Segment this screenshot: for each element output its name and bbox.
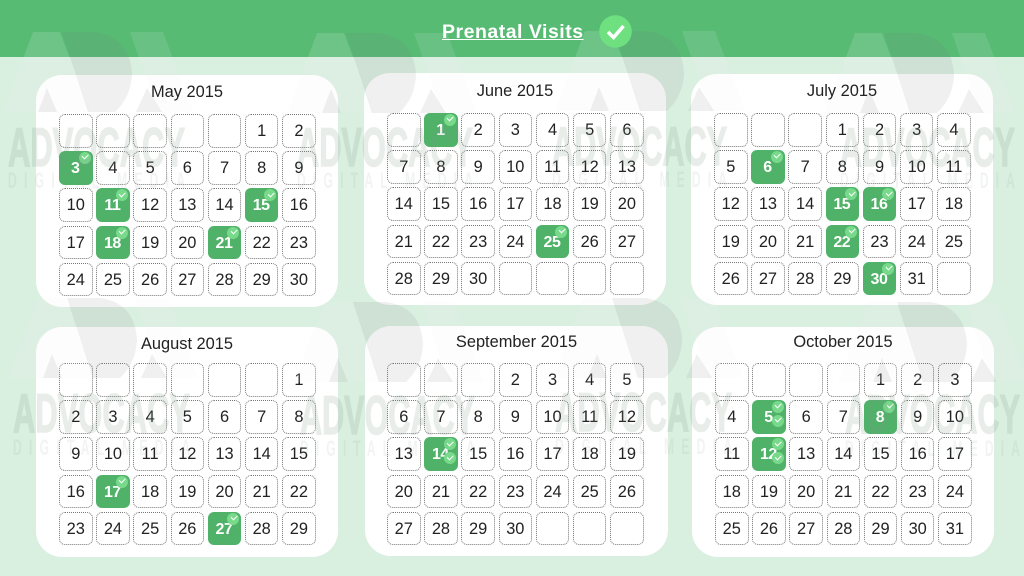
calendar grid: May: 16 bbox=[290, 196, 308, 214]
calendar grid: June: 16 bbox=[469, 195, 487, 213]
calendar grid: September: 18 bbox=[581, 445, 599, 463]
calendar grid: September: 15 bbox=[469, 445, 487, 463]
calendar grid: September: 10 bbox=[543, 408, 562, 426]
calendar grid: October: 14 bbox=[834, 445, 852, 463]
calendar grid: June: 21 bbox=[395, 233, 413, 251]
calendar grid: June: 24 bbox=[506, 233, 524, 251]
calendar grid: June: 8 bbox=[436, 158, 446, 176]
calendar grid: July: 3 bbox=[912, 121, 921, 139]
calendar grid: August: 6 bbox=[220, 408, 229, 426]
calendar grid: July: 22 bbox=[833, 234, 850, 251]
calendar grid: September: 19 bbox=[618, 445, 636, 463]
watermark overlay: ADVOCACY bbox=[8, 116, 185, 178]
calendar grid: June: 20 bbox=[618, 195, 636, 213]
calendar grid: July: 27 bbox=[759, 270, 777, 288]
calendar grid: May: 26 bbox=[141, 271, 159, 289]
calendar grid: October: 31 bbox=[946, 520, 964, 538]
watermark overlay: DIGITAL MEDIA bbox=[297, 168, 473, 193]
calendar grid: June bbox=[387, 113, 644, 295]
calendar grid: October: 3 bbox=[950, 371, 959, 389]
calendar grid: September: 26 bbox=[618, 483, 636, 501]
calendar grid: May: 8 bbox=[257, 159, 266, 177]
watermark overlay: ADVOCACY bbox=[552, 115, 727, 177]
calendar grid: June: 10 bbox=[506, 158, 524, 176]
calendar grid: June: 1 bbox=[436, 122, 445, 139]
calendar grid: August: 5 bbox=[183, 408, 192, 426]
calendar grid: October: 7 bbox=[839, 408, 848, 426]
calendar grid: October: 25 bbox=[723, 520, 741, 538]
calendar grid: June: 18 bbox=[543, 195, 562, 213]
calendar grid: August: 13 bbox=[215, 445, 234, 463]
heading: June 2015: June 2015 bbox=[477, 82, 553, 100]
calendar grid: May: 19 bbox=[141, 234, 159, 252]
calendar grid: September: 30 bbox=[506, 520, 524, 538]
calendar grid: May: 13 bbox=[178, 196, 196, 214]
calendar grid: October: 30 bbox=[909, 520, 927, 538]
calendar grid: May: 5 bbox=[146, 159, 155, 177]
calendar grid: September: 7 bbox=[436, 408, 446, 426]
calendar grid: October: 13 bbox=[797, 445, 815, 463]
calendar grid: August: 29 bbox=[290, 520, 308, 538]
calendar grid: July: 23 bbox=[870, 233, 889, 251]
calendar grid: July: 18 bbox=[945, 195, 963, 213]
calendar grid: July: 20 bbox=[759, 233, 777, 251]
calendar grid: June: 12 bbox=[581, 158, 599, 176]
calendar grid: June: 25 bbox=[544, 234, 560, 251]
calendar grid: May: 30 bbox=[290, 271, 308, 289]
calendar grid: September: 29 bbox=[469, 520, 487, 538]
calendar grid: October: 22 bbox=[871, 483, 890, 501]
calendar grid: June: 23 bbox=[469, 233, 487, 251]
calendar grid: September: 17 bbox=[543, 445, 562, 463]
calendar grid: May: 6 bbox=[183, 159, 192, 177]
calendar grid: August: 2 bbox=[71, 408, 80, 426]
calendar grid: June: 22 bbox=[432, 233, 450, 251]
calendar grid: October: 11 bbox=[723, 445, 740, 463]
calendar grid: May: 29 bbox=[253, 271, 271, 289]
calendar grid: August: 11 bbox=[142, 445, 159, 463]
calendar grid: September: 21 bbox=[432, 483, 450, 501]
calendar grid: September: 27 bbox=[395, 520, 413, 538]
heading: July 2015: July 2015 bbox=[807, 82, 877, 100]
calendar grid: August: 20 bbox=[215, 483, 234, 501]
calendar grid: September: 16 bbox=[506, 445, 524, 463]
calendar grid: August: 10 bbox=[104, 445, 122, 463]
heading: September 2015: September 2015 bbox=[456, 333, 577, 351]
calendar grid: August: 8 bbox=[294, 408, 303, 426]
calendar grid: September: 6 bbox=[399, 408, 408, 426]
calendar grid: October: 18 bbox=[723, 483, 741, 501]
calendar grid: October: 10 bbox=[946, 408, 964, 426]
calendar grid: September bbox=[387, 363, 644, 545]
calendar grid: May: 3 bbox=[71, 160, 80, 177]
calendar grid: August: 12 bbox=[178, 445, 196, 463]
calendar grid: September: 23 bbox=[506, 483, 524, 501]
calendar grid: October bbox=[715, 363, 972, 545]
calendar grid: May: 2 bbox=[294, 122, 303, 140]
calendar grid: May: 18 bbox=[104, 235, 121, 252]
calendar grid: August: 24 bbox=[104, 520, 122, 538]
calendar grid: July: 16 bbox=[870, 196, 888, 213]
calendar grid: July: 6 bbox=[763, 159, 772, 176]
calendar grid: July: 8 bbox=[838, 158, 847, 176]
heading: October 2015: October 2015 bbox=[793, 333, 893, 351]
panel: October 2015 bbox=[692, 327, 994, 557]
calendar grid: October: 17 bbox=[946, 445, 964, 463]
calendar grid: July: 12 bbox=[722, 195, 740, 213]
calendar grid: October: 2 bbox=[913, 371, 922, 389]
calendar grid: June: 19 bbox=[581, 195, 599, 213]
header bar bbox=[0, 0, 1024, 57]
calendar grid: July: 5 bbox=[726, 158, 735, 176]
calendar grid: May: 20 bbox=[178, 234, 196, 252]
watermark overlay: ADVOCACY bbox=[297, 116, 473, 178]
calendar grid: September: 20 bbox=[395, 483, 413, 501]
calendar grid: October: 8 bbox=[876, 409, 884, 426]
title: Prenatal Visits bbox=[442, 21, 584, 43]
calendar grid: October: 27 bbox=[797, 520, 815, 538]
calendar grid: June: 11 bbox=[544, 158, 561, 176]
watermark overlay: DIGITAL MEDIA bbox=[8, 168, 185, 193]
calendar grid: July: 11 bbox=[945, 158, 962, 176]
calendar grid: June: 27 bbox=[618, 233, 636, 251]
calendar grid: August: 27 bbox=[216, 521, 232, 538]
calendar grid: August: 15 bbox=[290, 445, 308, 463]
calendar grid: August: 23 bbox=[67, 520, 85, 538]
calendar grid: August: 14 bbox=[253, 445, 271, 463]
calendar grid: October: 23 bbox=[909, 483, 927, 501]
calendar grid: October: 1 bbox=[876, 371, 885, 389]
calendar grid: October: 16 bbox=[909, 445, 927, 463]
calendar grid: October: 5 bbox=[764, 409, 773, 426]
panel: July 2015 bbox=[691, 74, 993, 305]
calendar grid: August: 21 bbox=[253, 483, 271, 501]
calendar grid: June: 6 bbox=[622, 121, 631, 139]
calendar grid: July: 21 bbox=[796, 233, 814, 251]
calendar grid: May: 12 bbox=[141, 196, 159, 214]
calendar grid: September: 22 bbox=[469, 483, 487, 501]
calendar grid: September: 12 bbox=[618, 408, 636, 426]
calendar grid: June: 13 bbox=[618, 158, 636, 176]
calendar grid: July: 25 bbox=[945, 233, 963, 251]
watermark overlay: DIGITAL MEDIA bbox=[13, 435, 190, 460]
calendar grid: October: 21 bbox=[834, 483, 852, 501]
calendar grid: October: 28 bbox=[834, 520, 852, 538]
calendar grid: May: 21 bbox=[216, 235, 232, 252]
panel: May 2015 bbox=[36, 75, 338, 307]
calendar grid: May: 25 bbox=[104, 271, 122, 289]
calendar grid: August: 1 bbox=[294, 371, 303, 389]
calendar grid: August: 28 bbox=[253, 520, 271, 538]
calendar grid: June: 14 bbox=[395, 195, 413, 213]
watermark overlay: DIGITAL MEDIA bbox=[552, 167, 727, 192]
calendar grid: June: 15 bbox=[432, 195, 450, 213]
calendar grid: July: 14 bbox=[796, 195, 814, 213]
calendar grid: August: 17 bbox=[104, 484, 121, 501]
watermark overlay: DIGITAL MEDIA bbox=[555, 434, 732, 459]
calendar grid: June: 4 bbox=[548, 121, 557, 139]
calendar grid: June: 9 bbox=[474, 158, 483, 176]
calendar grid: September: 4 bbox=[585, 371, 594, 389]
calendar grid: October: 20 bbox=[797, 483, 815, 501]
calendar grid: July: 19 bbox=[722, 233, 740, 251]
calendar grid: September: 11 bbox=[581, 408, 598, 426]
watermark overlay: ADVOCACY bbox=[13, 382, 190, 444]
calendar grid: July: 7 bbox=[801, 158, 810, 176]
calendar grid: May: 10 bbox=[67, 196, 85, 214]
calendar grid: August: 7 bbox=[257, 408, 266, 426]
calendar grid: May: 27 bbox=[178, 271, 196, 289]
calendar grid: July: 2 bbox=[875, 121, 884, 139]
watermark overlay: DIGITAL MEDIA bbox=[845, 436, 1020, 461]
calendar grid: July: 29 bbox=[833, 270, 851, 288]
calendar grid: August: 25 bbox=[141, 520, 159, 538]
calendar grid: May: 23 bbox=[290, 234, 308, 252]
calendar grid: July: 26 bbox=[722, 270, 740, 288]
calendar grid: May: 4 bbox=[108, 159, 118, 177]
calendar grid: June: 26 bbox=[581, 233, 599, 251]
calendar grid: June: 28 bbox=[395, 270, 413, 288]
calendar grid: August: 4 bbox=[146, 408, 155, 426]
calendar grid: May: 15 bbox=[253, 197, 270, 214]
calendar grid: August: 18 bbox=[141, 483, 159, 501]
calendar grid: October: 9 bbox=[913, 408, 922, 426]
calendar grid: May: 28 bbox=[215, 271, 234, 289]
calendar grid: October: 26 bbox=[760, 520, 778, 538]
calendar grid: July: 10 bbox=[908, 158, 926, 176]
calendar grid: October: 29 bbox=[871, 520, 890, 538]
calendar grid: May: 24 bbox=[67, 271, 85, 289]
calendar grid: June: 29 bbox=[432, 270, 450, 288]
calendar grid: May: 9 bbox=[294, 159, 303, 177]
watermark overlay: ADVOCACY bbox=[555, 381, 732, 443]
calendar grid: July: 30 bbox=[870, 271, 888, 288]
icon: check mark bbox=[599, 15, 632, 48]
calendar grid: October: 6 bbox=[802, 408, 811, 426]
calendar grid: June: 5 bbox=[585, 121, 594, 139]
calendar grid: September: 9 bbox=[511, 408, 520, 426]
calendar grid: August: 19 bbox=[178, 483, 196, 501]
calendar grid: September: 28 bbox=[432, 520, 450, 538]
calendar grid: June: 3 bbox=[511, 121, 520, 139]
calendar grid: May: 7 bbox=[220, 159, 229, 177]
calendar grid: July: 4 bbox=[949, 121, 958, 139]
panel: June 2015 bbox=[364, 73, 666, 305]
calendar grid: October: 24 bbox=[946, 483, 964, 501]
calendar grid: July: 1 bbox=[838, 121, 847, 139]
calendar grid: September: 24 bbox=[543, 483, 562, 501]
calendar grid: May bbox=[59, 114, 316, 296]
calendar grid: July: 13 bbox=[759, 195, 777, 213]
calendar grid: May: 1 bbox=[257, 122, 266, 140]
calendar grid: July: 28 bbox=[796, 270, 814, 288]
calendar grid: September: 8 bbox=[474, 408, 483, 426]
calendar grid: May: 14 bbox=[215, 196, 234, 214]
calendar grid: June: 17 bbox=[506, 195, 524, 213]
panel: September 2015 bbox=[365, 326, 668, 556]
calendar grid: May: 17 bbox=[67, 234, 85, 252]
calendar grid: July: 31 bbox=[908, 270, 926, 288]
calendar grid: August: 16 bbox=[67, 483, 85, 501]
watermark overlay: ADVOCACY bbox=[300, 384, 475, 446]
calendar grid: June: 7 bbox=[399, 158, 408, 176]
calendar grid: August: 3 bbox=[108, 408, 118, 426]
calendar grid: August bbox=[59, 363, 316, 545]
calendar grid: June: 30 bbox=[469, 270, 487, 288]
calendar grid: July: 9 bbox=[875, 158, 884, 176]
calendar grid: July: 15 bbox=[833, 196, 850, 213]
calendar grid: September: 2 bbox=[511, 371, 520, 389]
calendar grid: August: 9 bbox=[71, 445, 80, 463]
watermark overlay: DIGITAL MEDIA bbox=[300, 436, 475, 461]
calendar grid: October: 15 bbox=[871, 445, 890, 463]
calendar grid: May: 11 bbox=[104, 197, 120, 214]
calendar grid: September: 3 bbox=[548, 371, 557, 389]
calendar grid: September: 14 bbox=[432, 446, 449, 463]
panel: August 2015 bbox=[36, 327, 338, 557]
heading: August 2015: August 2015 bbox=[141, 335, 233, 353]
calendar grid: September: 13 bbox=[395, 445, 413, 463]
heading: May 2015: May 2015 bbox=[151, 83, 223, 101]
watermark overlay: DIGITAL MEDIA bbox=[840, 168, 1015, 193]
calendar grid: July bbox=[714, 113, 971, 295]
calendar grid: October: 12 bbox=[760, 446, 777, 463]
calendar grid: May: 22 bbox=[253, 234, 271, 252]
calendar grid: September: 25 bbox=[581, 483, 599, 501]
calendar grid: October: 4 bbox=[727, 408, 736, 426]
calendar grid: June: 2 bbox=[474, 121, 483, 139]
calendar grid: August: 26 bbox=[178, 520, 196, 538]
calendar grid: July: 24 bbox=[908, 233, 926, 251]
calendar grid: September: 5 bbox=[622, 371, 631, 389]
calendar grid: July: 17 bbox=[908, 195, 926, 213]
calendar grid: October: 19 bbox=[760, 483, 778, 501]
calendar grid: August: 22 bbox=[290, 483, 308, 501]
